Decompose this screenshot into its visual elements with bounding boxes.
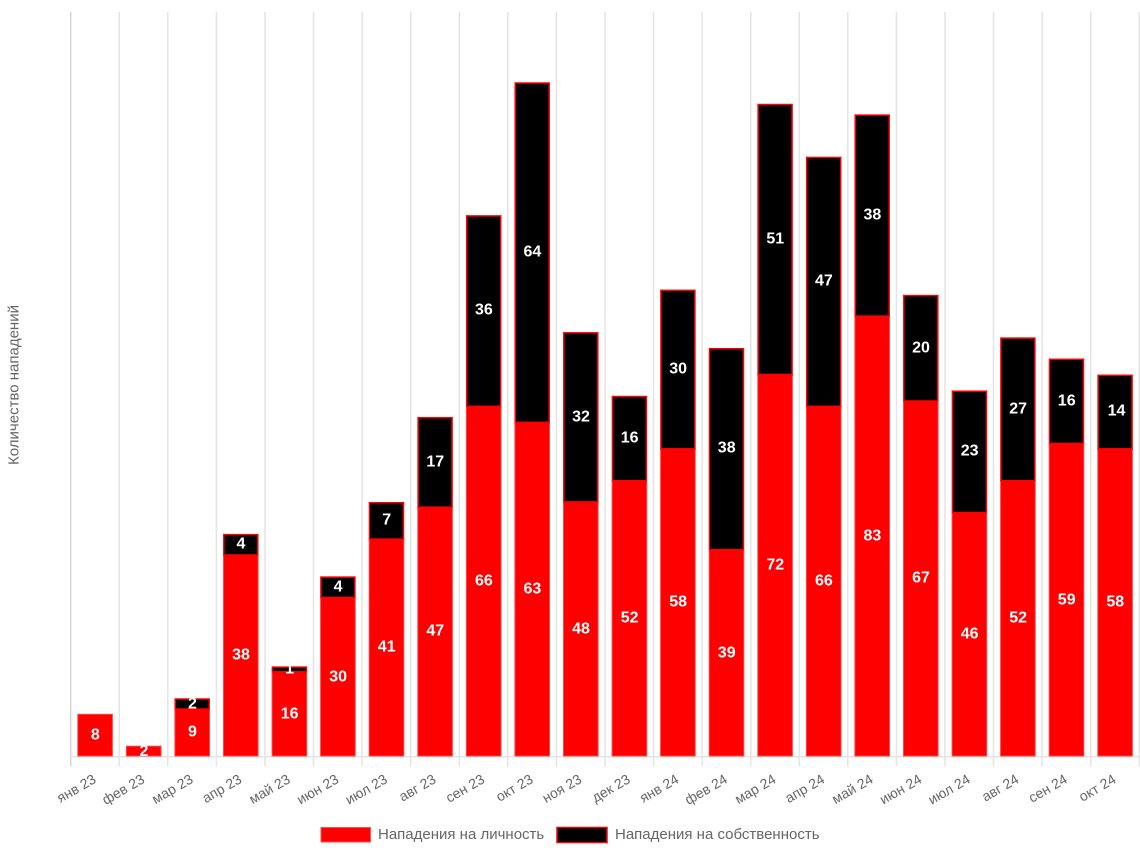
x axis labels: апр 24 bbox=[782, 771, 827, 806]
value labels: личность: 9 bbox=[188, 724, 197, 740]
legend bbox=[321, 826, 820, 843]
x axis labels: июл 24 bbox=[925, 771, 973, 807]
x axis labels bbox=[54, 771, 1119, 808]
value labels: собственность: 1 bbox=[285, 660, 294, 678]
x axis labels: фев 23 bbox=[99, 771, 147, 808]
value labels: личность: 66 bbox=[815, 572, 833, 590]
value labels: личность: 46 bbox=[961, 626, 979, 642]
value labels: собственность: 30 bbox=[669, 360, 687, 378]
value labels: личность: 41 bbox=[378, 638, 396, 656]
value labels: личность: 83 bbox=[864, 528, 881, 544]
value labels: собственность: 17 bbox=[426, 454, 444, 470]
value labels: собственность: 4 bbox=[237, 536, 246, 552]
value labels: собственность: 7 bbox=[382, 512, 391, 528]
value labels: собственность: 32 bbox=[572, 408, 590, 426]
x axis labels: окт 23 bbox=[493, 771, 536, 805]
x axis labels: фев 24 bbox=[682, 771, 730, 808]
value labels: личность bbox=[91, 528, 1124, 760]
x axis labels: май 23 bbox=[246, 771, 293, 807]
value labels: личность: 48 bbox=[572, 620, 590, 638]
legend item: личность: Нападения на личность bbox=[378, 826, 544, 843]
value labels: собственность: 4 bbox=[334, 578, 343, 596]
x axis labels: янв 23 bbox=[54, 771, 99, 806]
x axis labels: мар 24 bbox=[732, 771, 779, 807]
value labels: личность: 58 bbox=[1106, 594, 1124, 610]
value labels: собственность: 20 bbox=[912, 340, 930, 356]
value labels: личность: 52 bbox=[621, 610, 639, 626]
value labels: собственность: 14 bbox=[1108, 402, 1126, 420]
value labels: собственность: 64 bbox=[524, 244, 541, 260]
value labels: личность: 58 bbox=[669, 594, 687, 610]
x axis labels: дек 23 bbox=[589, 771, 633, 805]
x axis labels: июл 23 bbox=[342, 771, 390, 807]
value labels: личность: 72 bbox=[766, 556, 784, 574]
x axis labels: июн 23 bbox=[294, 771, 341, 807]
x axis labels: янв 24 bbox=[637, 771, 681, 806]
x axis labels: сен 23 bbox=[443, 771, 487, 806]
x axis labels: авг 23 bbox=[396, 771, 439, 804]
value labels: собственность: 47 bbox=[815, 272, 833, 290]
value labels: собственность: 38 bbox=[864, 206, 881, 224]
x axis labels: сен 24 bbox=[1026, 771, 1070, 806]
value labels: собственность: 51 bbox=[766, 230, 784, 248]
value labels: личность: 67 bbox=[912, 570, 930, 586]
value labels: собственность: 2 bbox=[188, 696, 197, 712]
x axis labels: июн 24 bbox=[877, 771, 924, 807]
value labels: личность: 2 bbox=[139, 743, 148, 760]
value labels: собственность: 16 bbox=[621, 430, 639, 446]
y axis title: Количество нападений bbox=[6, 305, 22, 465]
value labels: личность: 59 bbox=[1058, 592, 1076, 608]
value labels: личность: 63 bbox=[524, 580, 541, 598]
value labels: собственность: 16 bbox=[1058, 392, 1076, 410]
value labels: собственность bbox=[188, 206, 1125, 712]
x axis labels: ноя 23 bbox=[539, 771, 584, 806]
legend item: собственность: Нападения на собственность bbox=[615, 826, 820, 843]
series: нападения на собственность bbox=[175, 83, 1132, 709]
value labels: личность: 39 bbox=[718, 644, 736, 662]
value labels: собственность: 36 bbox=[475, 302, 493, 318]
x axis labels: апр 23 bbox=[199, 771, 244, 806]
value labels: личность: 52 bbox=[1009, 610, 1027, 626]
value labels: собственность: 38 bbox=[718, 440, 736, 456]
value labels: личность: 8 bbox=[91, 726, 100, 744]
x axis labels: май 24 bbox=[829, 771, 876, 807]
value labels: личность: 66 bbox=[475, 572, 493, 590]
value labels: личность: 30 bbox=[329, 668, 347, 686]
value labels: личность: 47 bbox=[426, 622, 444, 640]
x axis labels: мар 23 bbox=[149, 771, 196, 807]
x axis labels: авг 24 bbox=[979, 771, 1021, 804]
value labels: собственность: 23 bbox=[961, 442, 979, 460]
value labels: собственность: 27 bbox=[1009, 400, 1027, 418]
series: нападения на личность bbox=[78, 316, 1132, 756]
x axis labels: окт 24 bbox=[1076, 771, 1119, 805]
value labels: личность: 16 bbox=[281, 706, 299, 722]
value labels: личность: 38 bbox=[232, 646, 250, 664]
